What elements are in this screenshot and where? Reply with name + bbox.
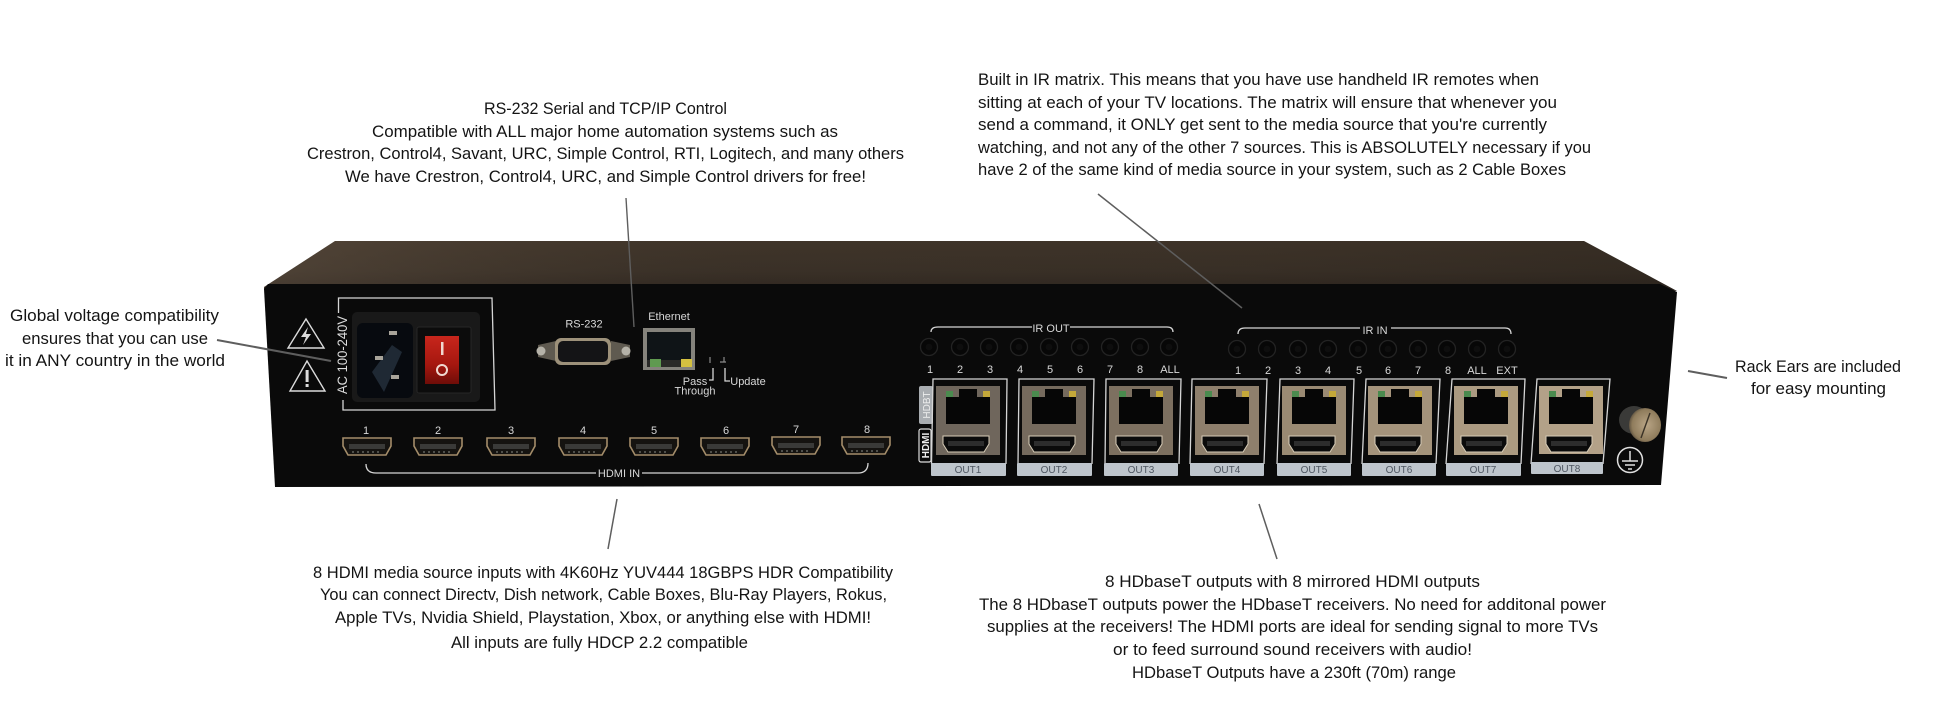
HDMI input ports: 4: [580, 425, 586, 437]
IR in jacks: 3: [1295, 365, 1301, 377]
callout text: rack ears: for easy mounting: [1751, 379, 1886, 398]
callout text: built in IR matrix: sitting at each of your TV locations. The matrix will ensure that whenever you: [978, 93, 1557, 112]
IR in jacks: EXT: [1496, 365, 1518, 377]
HDBT and HDMI side tags: HDMI: [921, 433, 932, 458]
callout text: HDMI inputs: Apple TVs, Nvidia Shield, Playstation, Xbox, or anything else with HDMI!: [335, 608, 871, 627]
pass through and update switch: Pass: [683, 376, 708, 388]
callout text: built in IR matrix: Built in IR matrix. This means that you have use handheld IR remotes when: [978, 70, 1539, 89]
IR in jacks: IR IN: [1362, 325, 1388, 337]
output module 1: [931, 379, 1007, 476]
IR out jacks: 7: [1107, 364, 1113, 376]
device: HDMI matrix rear view: [264, 241, 1677, 487]
IR out jacks: [920, 323, 1180, 376]
IR out jacks: IR OUT: [1032, 323, 1070, 335]
IR out jacks: 4: [1017, 364, 1023, 376]
device front panel: [264, 284, 1677, 487]
output module 2: OUT2: [1041, 465, 1068, 476]
HDMI input ports: HDMI IN: [598, 468, 640, 480]
AC voltage label: AC 100-240V: [334, 315, 350, 394]
HDMI input ports: 3: [508, 425, 514, 437]
output module 7: [1446, 379, 1525, 476]
IR out jacks: 5: [1047, 364, 1053, 376]
device top face: [264, 241, 1677, 291]
IR in jacks: 2: [1265, 365, 1271, 377]
power rocker switch: [417, 327, 471, 393]
power section: [288, 298, 495, 410]
callout text: HDbaseT outputs: HDbaseT Outputs have a 230ft (70m) range: [1132, 663, 1456, 682]
IR out jacks: 3: [987, 364, 993, 376]
callout text: HDMI inputs: You can connect Directv, Dish network, Cable Boxes, Blu-Ray Players, Rokus,: [320, 585, 887, 604]
callout text: global voltage compatibility: Global voltage compatibility: [10, 306, 219, 325]
output module 2: [1017, 379, 1094, 476]
Ethernet port: [643, 311, 695, 370]
output module 1: OUT1: [955, 465, 982, 476]
callout text: RS-232 and TCP/IP control: Compatible with ALL major home automation systems such as: [372, 122, 838, 141]
IR out jacks: 1: [927, 364, 933, 376]
HDMI input ports: 1: [363, 425, 369, 437]
output module 3: [1104, 379, 1181, 476]
leader line: IR matrix: [1098, 194, 1242, 308]
leader line: voltage: [217, 340, 331, 361]
callout text: RS-232 and TCP/IP control: Crestron, Control4, Savant, URC, Simple Control, RTI, Logitech, and many others: [307, 144, 904, 163]
callout text: built in IR matrix: send a command, it ONLY get sent to the media source that you're currently: [978, 115, 1547, 134]
HDMI input ports: 2: [435, 425, 441, 437]
callout text: RS-232 and TCP/IP control: [307, 99, 904, 186]
HDMI input ports: 7: [793, 424, 799, 436]
pass through and update switch: Update: [730, 376, 766, 388]
leader line: HDMI inputs: [608, 499, 617, 549]
RS-232 port: RS-232: [565, 318, 603, 330]
HDBT and HDMI side tags: [919, 386, 933, 462]
callout text: HDMI inputs: [313, 563, 893, 652]
callout text: HDbaseT outputs: 8 HDbaseT outputs with 8 mirrored HDMI outputs: [1105, 572, 1480, 591]
leader line: HDbaseT outputs: [1259, 504, 1277, 559]
leader line: RS-232: [626, 198, 634, 327]
IR out jacks: 8: [1137, 364, 1143, 376]
Ethernet port: Ethernet: [648, 311, 690, 323]
HDBT and HDMI side tags: HDBT: [922, 391, 933, 419]
callout text: HDbaseT outputs: [979, 572, 1606, 682]
output module 5: [1277, 379, 1354, 476]
callout text: RS-232 and TCP/IP control: We have Crestron, Control4, URC, and Simple Control drivers for free!: [345, 167, 866, 186]
pass through and update switch: Through: [675, 386, 715, 398]
callout text: global voltage compatibility: ensures that you can use: [22, 329, 208, 348]
output module 6: [1362, 379, 1440, 476]
RS-232 port: [536, 318, 630, 365]
icon: ground symbol: [1618, 448, 1642, 472]
IR out jacks: ALL: [1160, 364, 1180, 376]
pass through and update switch: [675, 357, 766, 398]
HDMI input ports: 6: [723, 425, 729, 437]
IR in jacks: [1228, 325, 1518, 377]
IR out jacks: 6: [1077, 364, 1083, 376]
IR in jacks: 6: [1385, 365, 1391, 377]
callout text: global voltage compatibility: it in ANY country in the world: [5, 351, 225, 370]
IR in jacks: 7: [1415, 365, 1421, 377]
power inlet socket: [357, 323, 413, 398]
output module 4: [1190, 379, 1267, 476]
callout text: built in IR matrix: [977, 70, 1591, 179]
IR out jacks: 2: [957, 364, 963, 376]
HDMI input ports: [343, 424, 890, 480]
callout text: built in IR matrix: have 2 of the same kind of media source in your system, such as 2 Cable Boxes: [978, 160, 1566, 179]
HDMI input ports: 5: [651, 425, 657, 437]
callout text: rack ears: Rack Ears are included: [1735, 357, 1901, 376]
callout text: HDbaseT outputs: or to feed surround sound receivers with audio!: [1113, 640, 1472, 659]
thumb screw: [1619, 406, 1661, 442]
output module 4: OUT4: [1214, 465, 1241, 476]
IR in jacks: 1: [1235, 365, 1241, 377]
callout text: HDMI inputs: All inputs are fully HDCP 2.2 compatible: [451, 633, 748, 652]
icon: caution warning: [290, 361, 325, 391]
callout text: built in IR matrix: watching, and not any of the other 7 sources. This is ABSOLUTELY necessary if you: [977, 138, 1591, 157]
IR in jacks: ALL: [1467, 365, 1487, 377]
output module 8: [1531, 379, 1610, 475]
callout text: global voltage compatibility: [5, 306, 225, 370]
callout text: HDbaseT outputs: supplies at the receivers! The HDMI ports are ideal for sending signal to more TVs: [987, 617, 1598, 636]
icon: high voltage warning: [288, 319, 324, 348]
output module 5: OUT5: [1301, 465, 1328, 476]
callout text: rack ears: [1735, 357, 1901, 398]
HDMI input ports: 8: [864, 424, 870, 436]
output module 7: OUT7: [1470, 465, 1497, 476]
output module 6: OUT6: [1386, 465, 1413, 476]
leader line: rack ears: [1688, 371, 1727, 378]
IR in jacks: 5: [1356, 365, 1362, 377]
callout text: HDbaseT outputs: The 8 HDbaseT outputs power the HDbaseT receivers. No need for additonal power: [979, 595, 1606, 614]
output module 3: OUT3: [1128, 465, 1155, 476]
output module 8: OUT8: [1554, 464, 1581, 475]
IR in jacks: 8: [1445, 365, 1451, 377]
callout text: HDMI inputs: 8 HDMI media source inputs with 4K60Hz YUV444 18GBPS HDR Compatibility: [313, 563, 893, 582]
IR in jacks: 4: [1325, 365, 1331, 377]
callout text: RS-232 and TCP/IP control: RS-232 Serial and TCP/IP Control: [484, 99, 727, 118]
